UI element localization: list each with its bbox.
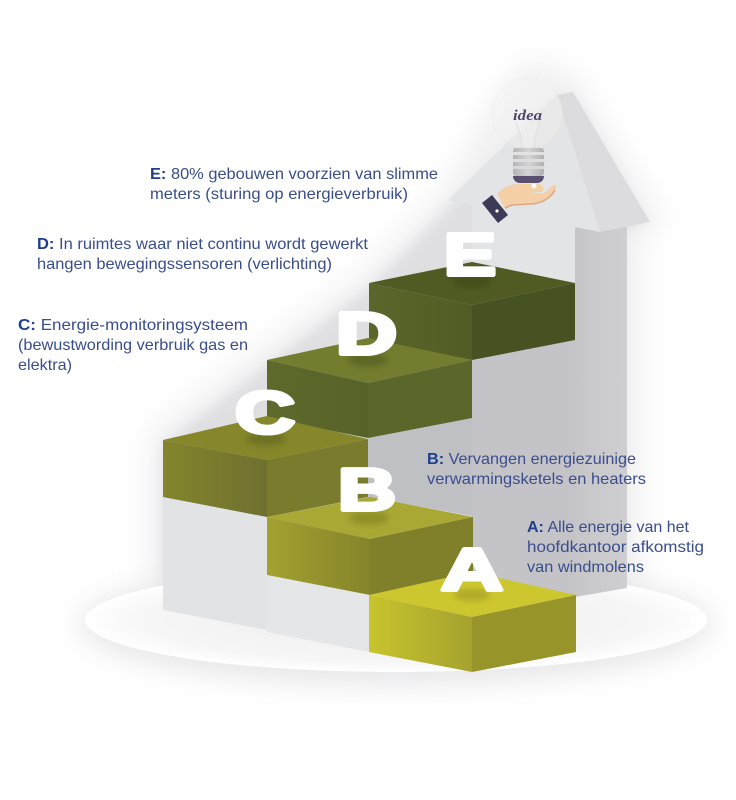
icon: light bulb (492, 78, 562, 183)
arrow head right face (557, 92, 650, 232)
text: C: C: Energie-monitoringsysteem (18, 317, 248, 334)
big arrow (368, 92, 650, 597)
text: D (37, 236, 369, 273)
figure glow shadow (80, 58, 712, 684)
bulb idea label: idea (513, 108, 543, 124)
text: A: hoofdkantoor afkomstig (527, 539, 704, 556)
text: B: verwarmingsketels en heaters (427, 471, 646, 488)
text: A (527, 519, 704, 576)
white column under C (163, 497, 267, 630)
arrow stem right face (575, 223, 627, 597)
bulb screw base (512, 148, 545, 183)
arrow head left face (448, 95, 600, 283)
letter C: C (235, 380, 295, 446)
arrow back wall lower (368, 358, 472, 516)
text: D: hangen bewegingssensoren (verlichting) (37, 256, 332, 273)
text: A: A: Alle energie van het (527, 519, 690, 536)
text: A: van windmolens (527, 559, 644, 576)
platform ellipse (85, 568, 707, 672)
step A (369, 572, 576, 672)
letter B: B (338, 457, 396, 523)
text: C: elektra) (18, 357, 72, 374)
text: C: (bewustwording verbruik gas en (18, 337, 248, 354)
arrow back wall (472, 340, 575, 597)
text: B: B: Vervangen energiezuinige (427, 451, 636, 468)
step E (369, 262, 575, 360)
step C (163, 416, 368, 517)
letter D: D (336, 301, 397, 367)
letter A: A (441, 537, 503, 603)
text: E: meters (sturing op energieverbruik) (150, 186, 408, 203)
text: E: E: 80% gebouwen voorzien van slimme (150, 166, 438, 183)
icon: hand (482, 184, 556, 223)
text: E (150, 166, 438, 203)
white column under B (267, 575, 369, 652)
text: B (427, 451, 646, 488)
letter E: E (444, 222, 496, 288)
text: D: D: In ruimtes waar niet continu wordt gewerkt (37, 236, 369, 253)
step B (267, 497, 473, 595)
text: C (18, 317, 248, 374)
step D (267, 338, 472, 438)
